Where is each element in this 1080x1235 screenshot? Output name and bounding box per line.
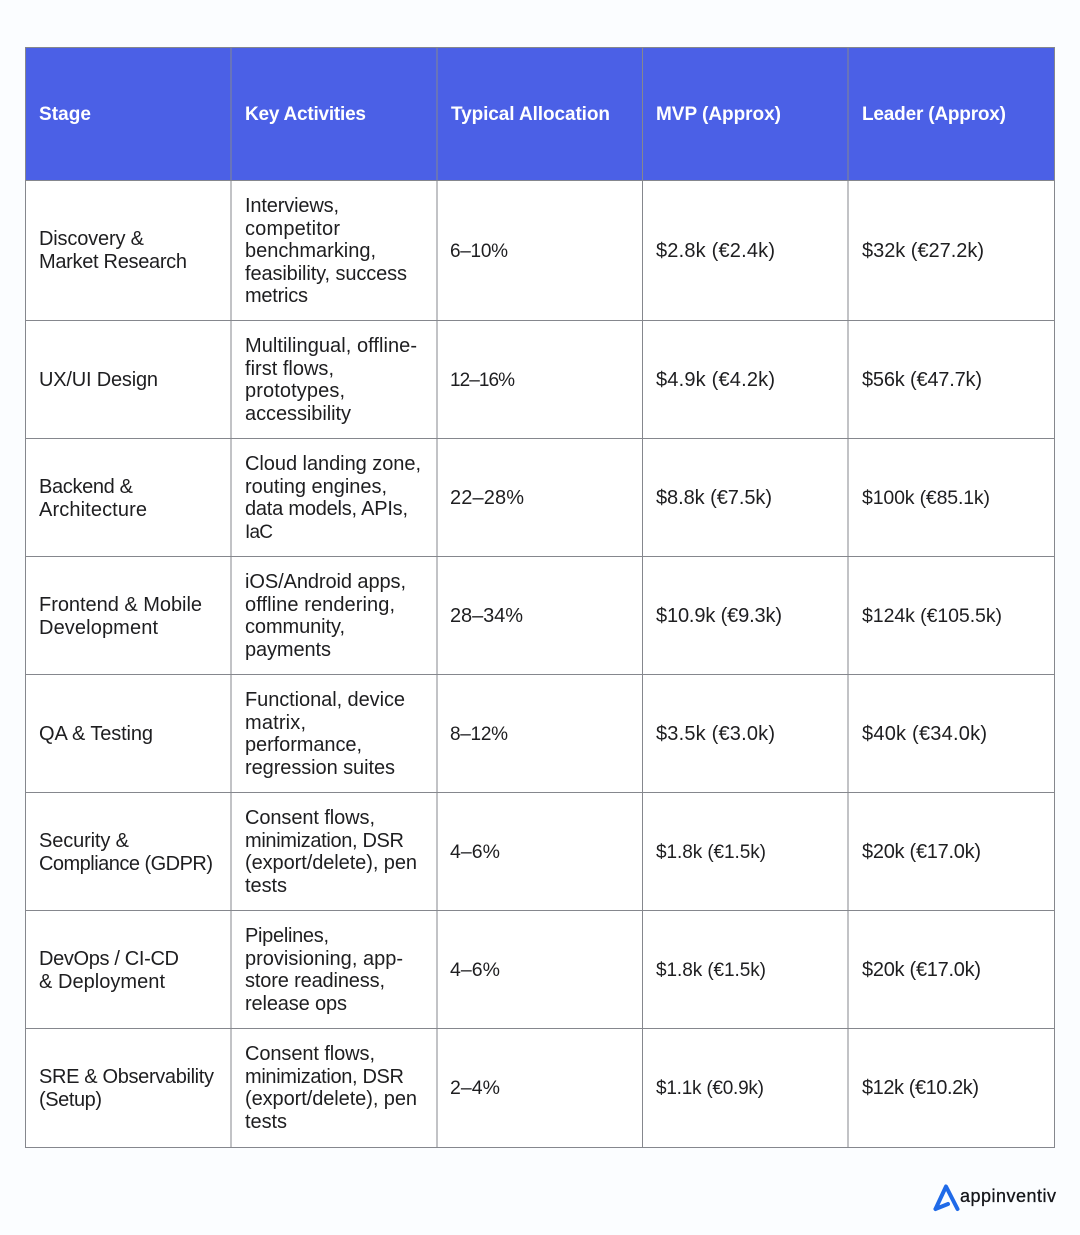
key activities: Functional, device <box>245 689 405 711</box>
key activities <box>245 195 407 307</box>
row: Discovery & Market Research <box>39 195 984 307</box>
stage <box>39 830 213 875</box>
leader cost: $124k (€105.5k) <box>862 605 1002 627</box>
stage <box>39 228 187 273</box>
allocation: 2–4% <box>450 1077 500 1099</box>
key activities <box>245 453 421 543</box>
key activities: first flows, <box>245 358 334 380</box>
key activities: provisioning, app- <box>245 948 403 970</box>
key activities: community, <box>245 616 345 638</box>
allocation: 12–16% <box>450 370 515 391</box>
row: Backend & Architecture <box>39 453 990 543</box>
key activities: iOS/Android apps, <box>245 571 406 593</box>
stage: QA & Testing <box>39 723 153 745</box>
key activities: tests <box>245 875 287 897</box>
stage <box>39 594 202 639</box>
stage: Discovery & <box>39 228 145 250</box>
key activities: (export/delete), pen <box>245 1088 417 1110</box>
stage: Market Research <box>39 251 187 273</box>
leader cost: $12k (€10.2k) <box>862 1077 979 1099</box>
header row <box>39 104 1006 125</box>
header: Leader (Approx): Leader (Approx) <box>862 104 1006 125</box>
stage <box>39 476 147 521</box>
key activities: routing engines, <box>245 476 387 498</box>
key activities <box>245 1043 417 1133</box>
key activities: payments <box>245 639 331 661</box>
key activities: (export/delete), pen <box>245 852 417 874</box>
key activities: Consent flows, <box>245 1043 375 1065</box>
leader cost: $40k (€34.0k) <box>862 723 987 745</box>
stage: Compliance (GDPR) <box>39 853 213 875</box>
stage: Backend & <box>39 476 134 498</box>
key activities: minimization, DSR <box>245 830 404 852</box>
key activities: benchmarking, <box>245 240 376 262</box>
allocation: 28–34% <box>450 605 523 627</box>
allocation: 6–10% <box>450 241 508 262</box>
key activities <box>245 807 417 897</box>
icon: logo mark <box>936 1186 958 1209</box>
key activities: Pipelines, <box>245 925 329 947</box>
allocation: 8–12% <box>450 724 508 745</box>
key activities: minimization, DSR <box>245 1066 404 1088</box>
key activities: matrix, <box>245 712 306 734</box>
row: SRE & Observability (Setup) <box>39 1043 979 1133</box>
header: MVP (Approx): MVP (Approx) <box>656 104 781 125</box>
allocation: 4–6% <box>450 959 500 981</box>
key activities: data models, APIs, <box>245 498 408 520</box>
allocation: 4–6% <box>450 841 500 863</box>
logo: appinventiv <box>936 1186 1056 1209</box>
key activities: performance, <box>245 734 362 756</box>
key activities: Cloud landing zone, <box>245 453 421 475</box>
allocation: 22–28% <box>450 487 524 509</box>
stage: Architecture <box>39 499 147 521</box>
stage: UX/UI Design <box>39 369 158 391</box>
header: Typical Allocation: Typical Allocation <box>451 104 610 125</box>
leader cost: $20k (€17.0k) <box>862 959 981 981</box>
stage: Development <box>39 617 158 639</box>
stage: & Deployment <box>39 971 165 993</box>
row: UX/UI Design <box>39 335 982 425</box>
key activities: metrics <box>245 285 308 307</box>
MVP cost: $8.8k (€7.5k) <box>656 487 772 509</box>
logo wordmark: appinventiv <box>960 1186 1056 1206</box>
stage: (Setup) <box>39 1089 102 1111</box>
key activities: competitor <box>245 218 340 240</box>
leader cost: $56k (€47.7k) <box>862 369 982 391</box>
key activities: Interviews, <box>245 195 339 217</box>
key activities: Multilingual, offline- <box>245 335 417 357</box>
MVP cost: $2.8k (€2.4k) <box>656 240 775 262</box>
MVP cost: $10.9k (€9.3k) <box>656 605 782 627</box>
row: Frontend & Mobile Development <box>39 571 1002 661</box>
stage: SRE & Observability <box>39 1066 214 1088</box>
leader cost: $100k (€85.1k) <box>862 487 990 509</box>
key activities: prototypes, <box>245 380 345 402</box>
key activities <box>245 925 403 1015</box>
MVP cost: $3.5k (€3.0k) <box>656 723 775 745</box>
MVP cost: $1.8k (€1.5k) <box>656 960 766 981</box>
row: Security & Compliance (GDPR) <box>39 807 981 897</box>
leader cost: $20k (€17.0k) <box>862 841 981 863</box>
key activities: regression suites <box>245 757 395 779</box>
key activities: IaC <box>245 522 273 543</box>
key activities: accessibility <box>245 403 351 425</box>
MVP cost: $1.1k (€0.9k) <box>656 1078 764 1099</box>
leader cost: $32k (€27.2k) <box>862 240 984 262</box>
key activities <box>245 571 406 661</box>
header: Key Activities: Key Activities <box>245 104 366 125</box>
MVP cost: $4.9k (€4.2k) <box>656 369 775 391</box>
key activities: release ops <box>245 993 347 1015</box>
stage: DevOps / CI-CD <box>39 948 179 970</box>
key activities <box>245 335 417 425</box>
stage <box>39 1066 214 1111</box>
MVP cost: $1.8k (€1.5k) <box>656 842 766 863</box>
stage <box>39 948 179 993</box>
key activities: store readiness, <box>245 970 385 992</box>
row: DevOps / CI-CD & Deployment <box>39 925 981 1015</box>
key activities: offline rendering, <box>245 594 395 616</box>
stage: Security & <box>39 830 130 852</box>
key activities: tests <box>245 1111 287 1133</box>
stage: Frontend & Mobile <box>39 594 202 616</box>
key activities: feasibility, success <box>245 263 407 285</box>
key activities: Consent flows, <box>245 807 375 829</box>
row: QA & Testing <box>39 689 987 779</box>
header: Stage: Stage <box>39 104 91 125</box>
key activities <box>245 689 405 779</box>
